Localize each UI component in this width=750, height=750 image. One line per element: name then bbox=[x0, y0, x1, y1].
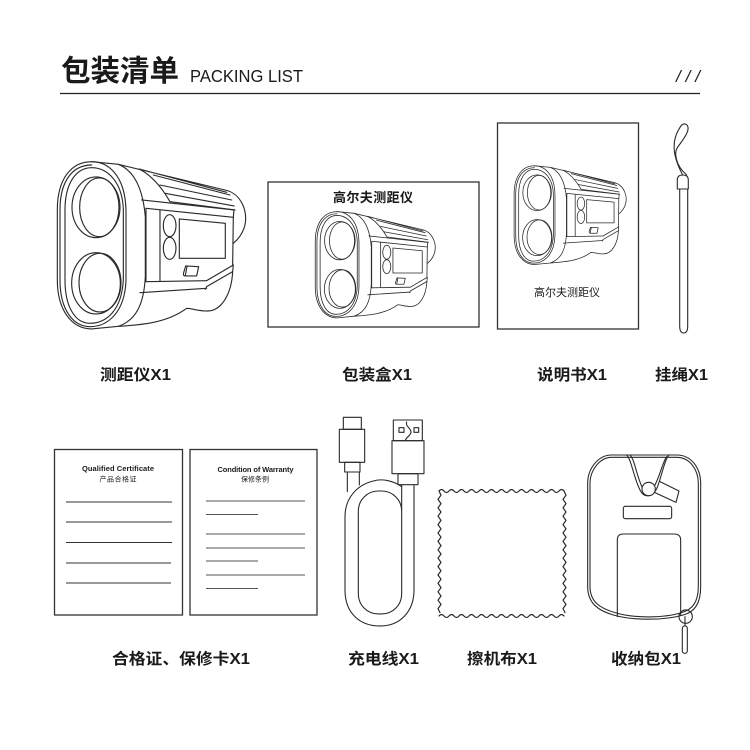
title bbox=[61, 55, 303, 88]
icon: carrying pouch bbox=[588, 455, 701, 653]
panel: packaging box bbox=[268, 182, 479, 327]
panel: packaging box: 高尔夫测距仪 bbox=[333, 190, 413, 205]
icon: USB cable bbox=[339, 417, 424, 626]
panel: warranty: Condition of Warranty bbox=[218, 465, 294, 474]
panel: warranty: 保修条例 bbox=[241, 474, 269, 484]
label: pouch: 收纳包X1 bbox=[611, 649, 681, 668]
label: box: 包装盒X1 bbox=[342, 365, 412, 384]
panel: qualified certificate bbox=[54, 450, 182, 615]
icon: rangefinder bbox=[57, 162, 246, 329]
decorative slashes: /// bbox=[675, 67, 702, 86]
label: cloth: 擦机布X1 bbox=[467, 649, 537, 668]
label: rangefinder: 测距仪X1 bbox=[100, 366, 171, 384]
label: manual: 说明书X1 bbox=[537, 366, 607, 384]
icon: cleaning cloth bbox=[438, 490, 566, 618]
panel: qualified certificate: Qualified Certificate bbox=[82, 464, 154, 473]
label: cable: 充电线X1 bbox=[348, 649, 419, 668]
title: PACKING LIST bbox=[190, 66, 303, 86]
panel: manual bbox=[498, 123, 638, 329]
label: certificate and warranty: 合格证、保修卡X1 bbox=[112, 649, 250, 668]
panel: warranty bbox=[190, 450, 317, 615]
panel: qualified certificate: 产品合格证 bbox=[100, 474, 136, 484]
panel: manual: 高尔夫测距仪 bbox=[534, 285, 600, 299]
icon: lanyard bbox=[674, 124, 688, 333]
label: lanyard: 挂绳X1 bbox=[655, 366, 708, 384]
title: 包装清单 bbox=[61, 55, 179, 88]
